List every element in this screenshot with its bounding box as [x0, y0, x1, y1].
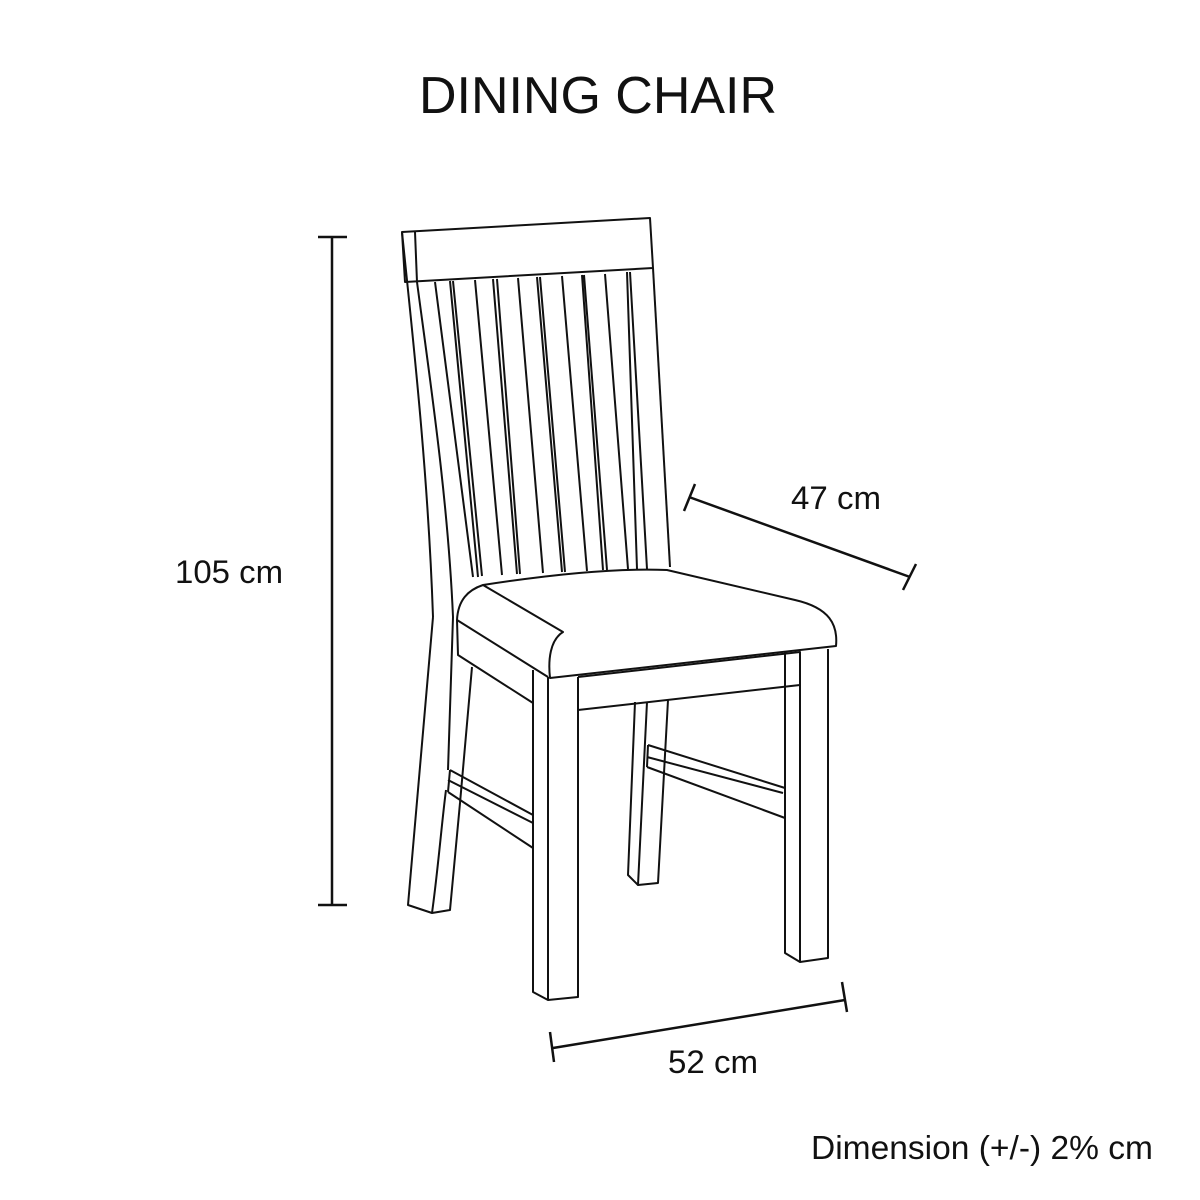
label: 105 cm: 105 cm — [175, 554, 283, 590]
chair drawing — [402, 218, 836, 1000]
dimension: height 105 cm — [318, 237, 347, 905]
title: DINING CHAIR — [419, 67, 777, 125]
stretchers — [448, 745, 785, 848]
footer note: Dimension (+/-) 2% cm — [811, 1129, 1153, 1166]
legs — [408, 617, 828, 1000]
label: 47 cm: 47 cm — [791, 480, 881, 516]
dimension: depth 47 cm — [684, 484, 916, 590]
label: 52 cm: 52 cm — [668, 1044, 758, 1080]
dimension: width 52 cm — [550, 982, 847, 1062]
seat — [457, 570, 836, 710]
chair back — [402, 218, 670, 617]
